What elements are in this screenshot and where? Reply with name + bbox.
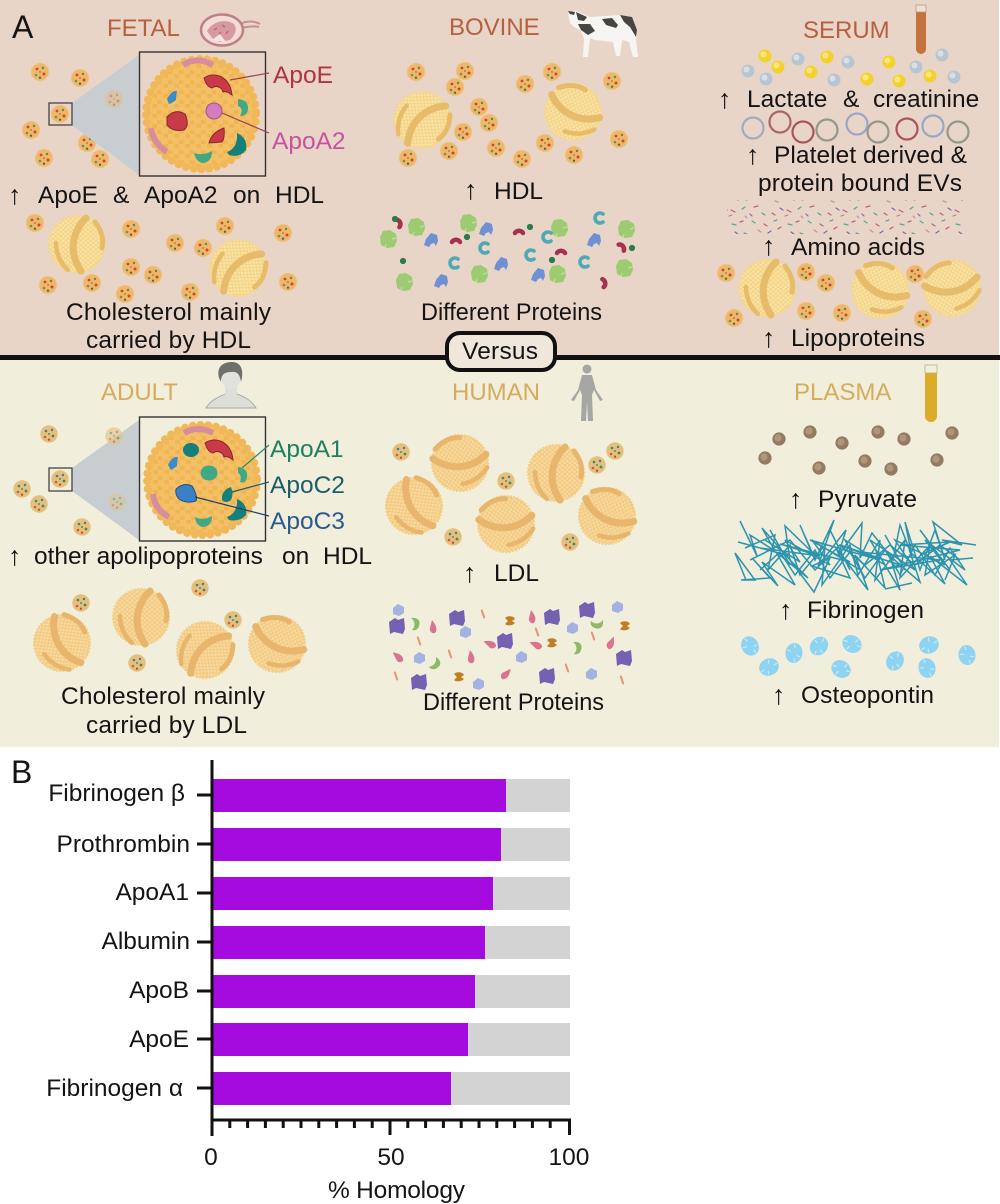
text: lactate and creatinine: ↑: [718, 84, 732, 114]
column: human: [375, 364, 643, 716]
heading: BOVINE: BOVINE: [449, 14, 540, 41]
bars: homology and remainder: [213, 779, 570, 1105]
amino acid dashes: [727, 200, 963, 234]
text: increased LDL: [463, 558, 539, 588]
bar chart: percent homology: [46, 760, 589, 1204]
LDL particles: [375, 431, 643, 556]
icon: adult portrait: [206, 362, 256, 408]
column: plasma: [735, 365, 977, 710]
text: increased LDL: LDL: [494, 560, 539, 587]
text: cholesterol carried by HDL: [66, 299, 272, 354]
text: ApoE and ApoA2 on HDL: on: [233, 182, 260, 209]
text: cholesterol carried by LDL: [61, 683, 266, 739]
small HDL particles upper: [22, 63, 109, 168]
text: increased HDL: ↑: [464, 175, 478, 205]
icon: plasma tube: [925, 365, 937, 422]
category labels: Fibrinogen β: [48, 780, 185, 807]
versus badge: [447, 333, 555, 370]
panel label A: A: [12, 9, 34, 45]
text: lactate and creatinine: creatinine: [873, 86, 979, 113]
osteopontin blobs: [738, 632, 977, 681]
text: different proteins: Different Proteins: [423, 689, 604, 716]
text: ApoE and ApoA2 on HDL: ApoA2: [144, 182, 218, 209]
panel: bottom adult human plasma: [0, 360, 999, 747]
text: ApoE and ApoA2 on HDL: ↑: [8, 180, 22, 210]
text: platelet derived and protein bound EVs: Platelet derived &: [774, 142, 967, 169]
text: lactate and creatinine: [718, 84, 979, 114]
text: other apolipoproteins on HDL: other apolipoproteins: [34, 543, 263, 570]
zoom source box: [49, 468, 72, 491]
lipoproteins: [383, 62, 628, 168]
heading: HUMAN: HUMAN: [452, 379, 540, 406]
text: pyruvate: ↑: [789, 484, 802, 514]
x axis tick labels: [204, 1144, 589, 1171]
icon: serum tube: [916, 5, 926, 54]
faded HDL particles: [105, 427, 126, 511]
text: other apolipoproteins on HDL: on: [282, 543, 309, 570]
text: lipoproteins: Lipoproteins: [791, 325, 925, 352]
category labels: Albumin: [101, 928, 190, 955]
label ApoE: ApoE: [273, 62, 333, 89]
x axis tick labels: 100: [549, 1144, 589, 1171]
lactate and creatinine dots: [742, 48, 960, 88]
text: ApoE and ApoA2 on HDL: HDL: [275, 182, 324, 209]
label ApoC3: ApoC3: [270, 508, 345, 535]
text: amino acids: ↑: [762, 231, 776, 261]
column: fetal: [8, 14, 346, 354]
text: other apolipoproteins on HDL: [8, 541, 372, 571]
category labels: ApoE: [129, 1026, 189, 1053]
text: other apolipoproteins on HDL: HDL: [323, 543, 372, 570]
x axis tick labels: 50: [377, 1144, 405, 1171]
text: lactate and creatinine: &: [843, 86, 859, 113]
text: cholesterol carried by LDL: Cholesterol mainly: [61, 683, 266, 710]
column: adult: [8, 362, 372, 739]
category labels: ApoA1: [115, 879, 189, 906]
category labels: Prothrombin: [57, 831, 190, 858]
leader lines: [242, 445, 269, 468]
lipoproteins lower: [23, 579, 313, 689]
text: increased LDL: ↑: [463, 558, 476, 588]
faded HDL particle: [105, 90, 123, 108]
zoom wedge: [72, 55, 139, 175]
axes and ticks: [197, 760, 571, 1136]
column: bovine: [380, 11, 638, 326]
heading: PLASMA: PLASMA: [794, 379, 891, 406]
text: increased HDL: [464, 175, 543, 205]
pyruvate dots: [758, 425, 959, 476]
icon: human figure: [571, 364, 603, 421]
text: ApoE and ApoA2 on HDL: &: [113, 182, 129, 209]
icon: fetus in womb: [201, 14, 260, 46]
heading: FETAL: FETAL: [107, 15, 180, 42]
zoom wedge: [72, 420, 139, 540]
label ApoA2: ApoA2: [272, 128, 346, 155]
category labels: Fibrinogen α: [46, 1075, 183, 1102]
column: serum: [717, 5, 986, 353]
heading: SERUM: SERUM: [803, 17, 890, 44]
text: other apolipoproteins on HDL: ↑: [8, 541, 22, 571]
label ApoA1: ApoA1: [270, 436, 344, 463]
text: osteopontin: Osteopontin: [801, 682, 934, 709]
text: osteopontin: ↑: [772, 680, 786, 710]
icon: cow: [568, 11, 638, 57]
human proteins: [389, 601, 632, 690]
text: lipoproteins: ↑: [762, 323, 776, 353]
text: platelet derived and protein bound EVs: [746, 140, 967, 197]
panel: top bovine fetal serum: [0, 0, 999, 355]
small HDL particles upper: [13, 425, 91, 536]
x axis tick labels: 0: [204, 1144, 218, 1171]
text: cholesterol carried by HDL: Cholesterol mainly: [66, 299, 272, 326]
text: fibrinogen: Fibrinogen: [807, 597, 924, 624]
versus badge: Versus: [462, 338, 538, 365]
zoomed HDL particle box: [140, 417, 269, 541]
heading: ADULT: ADULT: [101, 379, 178, 406]
text: ApoE and ApoA2 on HDL: [8, 180, 324, 210]
x axis title: % Homology: [328, 1177, 466, 1204]
text: pyruvate: [789, 484, 917, 514]
text: fibrinogen: ↑: [779, 595, 792, 625]
text: platelet derived and protein bound EVs: protein bound EVs: [758, 170, 962, 197]
text: amino acids: Amino acids: [791, 234, 925, 261]
label ApoC2: ApoC2: [270, 472, 345, 499]
lipoproteins: [717, 254, 986, 328]
lipoproteins lower: [26, 214, 297, 307]
text: cholesterol carried by LDL: carried by LDL: [86, 712, 247, 739]
text: cholesterol carried by HDL: carried by HDL: [86, 327, 251, 354]
text: increased HDL: HDL: [494, 178, 543, 205]
text: platelet derived and protein bound EVs: ↑: [746, 140, 760, 170]
text: lactate and creatinine: Lactate: [747, 86, 827, 113]
zoom source box: [49, 103, 72, 125]
category labels: ApoB: [129, 977, 189, 1004]
text: ApoE and ApoA2 on HDL: ApoE: [38, 182, 98, 209]
bovine proteins: [380, 213, 635, 291]
leader lines: [222, 73, 269, 133]
extracellular vesicle rings: [742, 112, 968, 142]
text: pyruvate: Pyruvate: [818, 486, 917, 513]
divider bar: [0, 355, 1000, 360]
zoomed HDL particle box: [140, 52, 269, 176]
panel label B: B: [11, 754, 32, 790]
text: different proteins: Different Proteins: [421, 299, 602, 326]
category labels: [46, 780, 190, 1102]
fibrinogen mesh: [735, 520, 976, 592]
